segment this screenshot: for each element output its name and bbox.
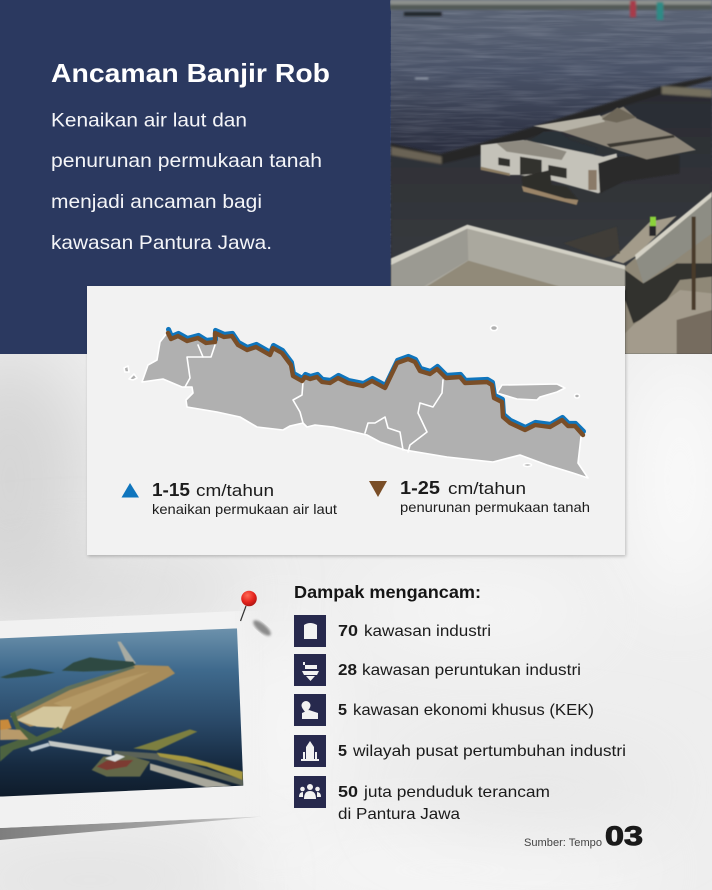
legend: land subsidence: 1-25 [400, 478, 440, 498]
page number: 03 [605, 821, 643, 851]
item: 5 industrial growth centres: wilayah pusat pertumbuhan industri [352, 743, 626, 760]
item: 28 designated industrial zones: 28 [338, 662, 357, 679]
heading: impacts: Dampak mengancam: [294, 582, 481, 602]
intro text block: menjadi ancaman bagi [51, 191, 262, 213]
intro text block: penurunan permukaan tanah [51, 150, 322, 172]
legend: land subsidence: cm/tahun [448, 479, 526, 498]
impact list [294, 615, 626, 823]
item: 50 million residents: juta penduduk terancam [363, 784, 550, 801]
panel: Java map card [87, 286, 625, 555]
heading: Ancaman Banjir Rob [51, 58, 330, 88]
legend: land subsidence [369, 478, 590, 515]
intro text block: Kenaikan air laut dan [51, 110, 247, 132]
map: Java provinces [124, 325, 588, 478]
item: 28 designated industrial zones [294, 654, 581, 686]
land subsidence coastline [168, 333, 583, 435]
item: 70 industrial estates: kawasan industri [364, 623, 491, 640]
sea level rise coastline [168, 329, 584, 431]
item: 50 million residents: di Pantura Jawa [338, 806, 460, 823]
item: 5 special economic zones: kawasan ekonomi khusus (KEK) [353, 702, 594, 719]
item: 50 million residents: 50 [338, 784, 358, 801]
photo: flooded mosque on the Jakarta coast [390, 0, 712, 354]
item: 70 industrial estates [294, 615, 491, 647]
legend: sea level rise [122, 480, 337, 517]
photo: sea wall and reclaimed land [0, 627, 247, 800]
icon: red map pin [240, 591, 273, 638]
item: 28 designated industrial zones: kawasan peruntukan industri [362, 662, 581, 679]
legend: sea level rise: 1-15 [152, 480, 190, 500]
item: 5 special economic zones: 5 [338, 702, 347, 719]
intro text block: kawasan Pantura Jawa. [51, 232, 272, 254]
source credit: Sumber: Tempo [524, 837, 602, 849]
item: 70 industrial estates: 70 [338, 623, 358, 640]
item: 5 industrial growth centres: 5 [338, 743, 347, 760]
legend: sea level rise: cm/tahun [196, 481, 274, 500]
photo print pinned to the page [0, 611, 270, 840]
legend: sea level rise: kenaikan permukaan air laut [152, 501, 337, 517]
intro text block [51, 110, 322, 254]
panel: navy title block [0, 0, 391, 354]
item: 5 special economic zones [294, 694, 594, 726]
item: 5 industrial growth centres [294, 735, 626, 767]
legend: land subsidence: penurunan permukaan tanah [400, 499, 590, 515]
item: 50 million residents [294, 776, 550, 823]
